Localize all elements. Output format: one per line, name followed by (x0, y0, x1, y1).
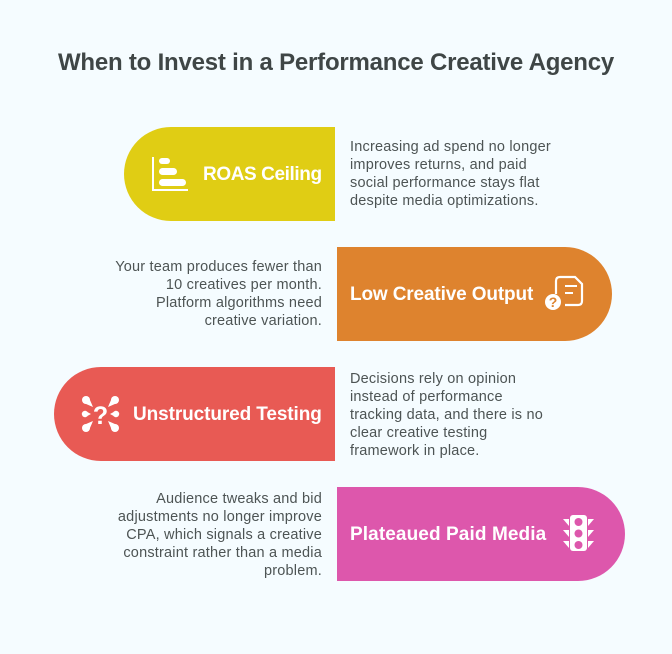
panel: Plateaued Paid Media (337, 487, 625, 581)
title: When to Invest in a Performance Creative Agency (58, 49, 614, 76)
icon: question network: ? (93, 402, 108, 430)
text block: Unstructured Testing (350, 371, 543, 459)
text block: Plateaued Paid Media: adjustments no longer improve (118, 509, 322, 525)
text block: ROAS Ceiling (350, 139, 551, 209)
text block: ROAS Ceiling: social performance stays flat (350, 175, 540, 191)
text block: ROAS Ceiling: improves returns, and paid (350, 157, 527, 173)
label: Low Creative Output (350, 284, 533, 305)
icon: bar chart (152, 157, 188, 191)
text block: Plateaued Paid Media: constraint rather than a media (123, 545, 322, 561)
label: Unstructured Testing (133, 404, 322, 425)
text block: Unstructured Testing: Decisions rely on opinion (350, 371, 516, 387)
panel: Unstructured Testing (54, 367, 335, 461)
text block: ROAS Ceiling: despite media optimizations. (350, 193, 539, 209)
text block: Low Creative Output: Platform algorithms need (156, 295, 322, 311)
panel: Low Creative Output (337, 247, 612, 341)
text block: Plateaued Paid Media: problem. (264, 563, 322, 579)
text block: Plateaued Paid Media (118, 491, 322, 579)
icon: document question: ? (549, 294, 557, 310)
text block: Plateaued Paid Media: CPA, which signals a creative (126, 527, 322, 543)
text block: Unstructured Testing: framework in place. (350, 443, 480, 459)
label: Plateaued Paid Media (350, 524, 546, 545)
text block: Unstructured Testing: clear creative testing (350, 425, 487, 441)
text block: Low Creative Output: creative variation. (205, 313, 322, 329)
label: ROAS Ceiling (203, 164, 322, 185)
text block: Unstructured Testing: instead of performance (350, 389, 503, 405)
text block: ROAS Ceiling: Increasing ad spend no longer (350, 139, 551, 155)
icon: question network (82, 396, 120, 432)
text block: Low Creative Output: 10 creatives per month. (166, 277, 322, 293)
text block: Low Creative Output: Your team produces fewer than (115, 259, 322, 275)
panel: ROAS Ceiling (124, 127, 335, 221)
text block: Low Creative Output (115, 259, 322, 329)
icon: document question (545, 276, 584, 310)
text block: Unstructured Testing: tracking data, and there is no (350, 407, 543, 423)
icon: traffic light (563, 515, 594, 551)
text block: Plateaued Paid Media: Audience tweaks and bid (156, 491, 322, 507)
